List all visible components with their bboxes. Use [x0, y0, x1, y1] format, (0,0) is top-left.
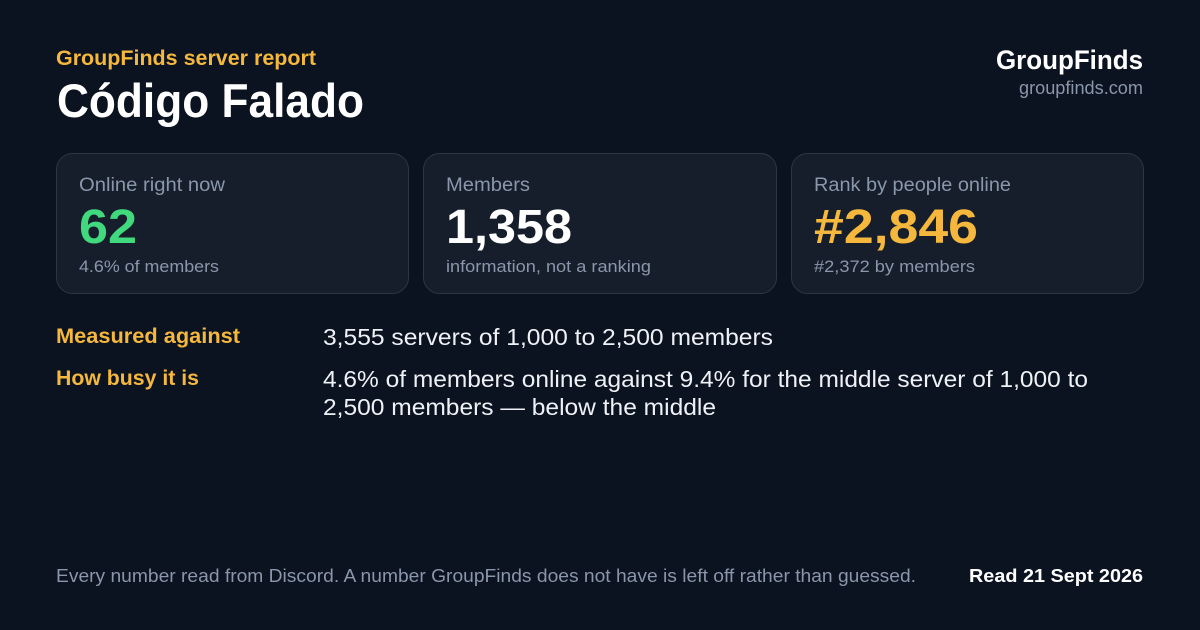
row text: how busy it is: 2,500 members — below the middle	[323, 394, 716, 420]
panel: members	[424, 154, 776, 294]
eyebrow: report label: GroupFinds server report	[56, 46, 316, 70]
panel: online right now	[56, 154, 408, 294]
card label: Rank by people online	[814, 175, 1011, 196]
card note: information, not a ranking	[446, 257, 651, 276]
title: Código Falado	[57, 74, 364, 127]
footer note: Every number read from Discord. A number GroupFinds does not have is left off rather than guessed.	[56, 566, 916, 586]
footer date: Read 21 Sept 2026	[969, 565, 1143, 586]
card value: 62	[79, 201, 137, 254]
row text: how busy it is: 4.6% of members online against 9.4% for the middle server of 1,000 to	[323, 366, 1088, 392]
brand block	[996, 45, 1143, 98]
card value: #2,846	[814, 201, 978, 254]
row label: measured against: Measured against	[56, 325, 240, 348]
row text: measured against: 3,555 servers of 1,000 to 2,500 members	[323, 324, 773, 350]
brand url: groupfinds.com	[1019, 78, 1143, 98]
row label: how busy it is: How busy it is	[56, 367, 199, 390]
card note: 4.6% of members	[79, 257, 219, 276]
row text: how busy it is	[323, 366, 1088, 420]
panel: rank by people online	[792, 154, 1144, 294]
card label: Members	[446, 175, 530, 196]
card note: #2,372 by members	[814, 257, 975, 276]
card label: Online right now	[79, 175, 225, 196]
brand name: GroupFinds	[996, 45, 1143, 75]
card value: 1,358	[446, 201, 572, 254]
